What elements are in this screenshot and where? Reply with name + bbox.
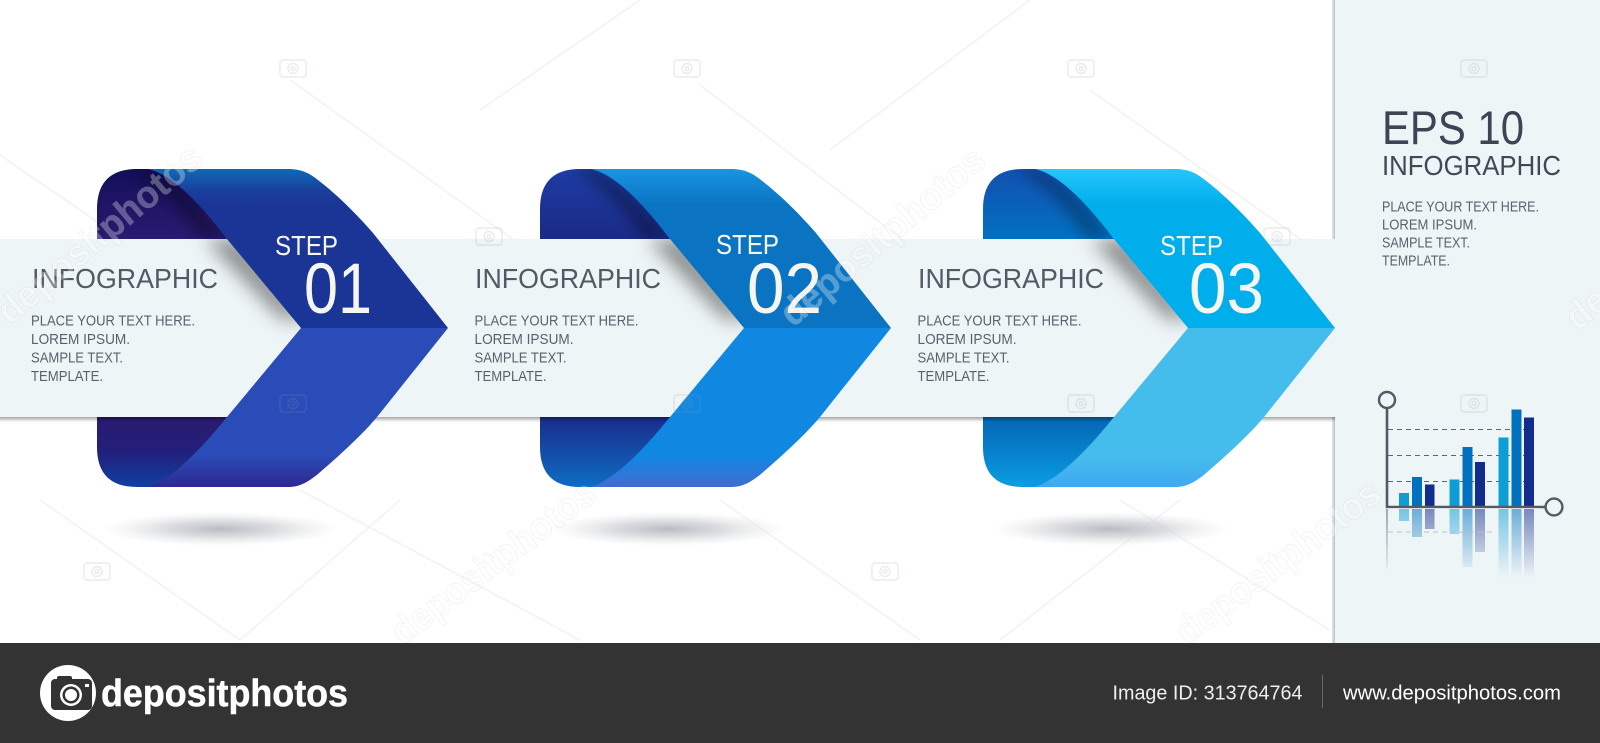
arrow: step 02 bbox=[591, 169, 891, 487]
sidebar heading and text: SAMPLE TEXT. bbox=[1382, 234, 1470, 252]
sidebar heading and text: PLACE YOUR TEXT HERE. bbox=[1382, 198, 1539, 216]
bar chart bbox=[1379, 392, 1562, 580]
watermark overlay: depositphotos bbox=[1168, 472, 1389, 653]
watermark overlay: depositphotos bbox=[772, 139, 994, 335]
website url: www.depositphotos.com bbox=[1342, 682, 1561, 704]
sidebar heading and text: EPS 10 bbox=[1382, 101, 1524, 154]
footer bar bbox=[0, 643, 1600, 743]
text block: step 03: LOREM IPSUM. bbox=[918, 331, 1016, 348]
watermark overlay: depositphotos bbox=[383, 472, 604, 653]
arrow: step 01 bbox=[148, 169, 448, 487]
text block: step 02: INFOGRAPHIC bbox=[475, 263, 661, 294]
text block: step 01: TEMPLATE. bbox=[31, 368, 103, 385]
panel: right sidebar bbox=[1332, 0, 1600, 643]
arrow: step 03 bbox=[1035, 169, 1335, 487]
step 01 labels: STEP bbox=[275, 230, 338, 261]
image id: Image ID: 313764764 bbox=[1112, 682, 1302, 704]
fold shadow on band 2 bbox=[648, 239, 751, 322]
text block: step 03: INFOGRAPHIC bbox=[918, 263, 1104, 294]
step 03 labels: 03 bbox=[1189, 250, 1264, 329]
text block: step 01: LOREM IPSUM. bbox=[31, 331, 130, 348]
step 03 labels: STEP bbox=[1160, 230, 1223, 261]
shape backs: step 01 bbox=[97, 169, 240, 487]
sidebar heading and text: INFOGRAPHIC bbox=[1382, 150, 1561, 181]
sidebar heading and text: LOREM IPSUM. bbox=[1382, 216, 1477, 234]
text block: step 02: SAMPLE TEXT. bbox=[474, 350, 566, 366]
text block: step 03 bbox=[918, 263, 1104, 385]
floor shadow 2 bbox=[550, 512, 786, 546]
logo wordmark: depositphotos bbox=[101, 673, 348, 715]
step 01 labels: 01 bbox=[304, 250, 372, 329]
shape backs: step 02 bbox=[540, 169, 683, 487]
fold shadow on band 3 bbox=[1091, 239, 1194, 322]
sidebar heading and text: TEMPLATE. bbox=[1382, 252, 1450, 270]
text block: step 01: SAMPLE TEXT. bbox=[31, 350, 123, 366]
text block: step 02 bbox=[474, 263, 661, 385]
watermark overlay bbox=[0, 137, 1600, 653]
horizontal band bbox=[0, 239, 1340, 422]
text block: step 02: LOREM IPSUM. bbox=[474, 331, 574, 348]
text block: step 03: PLACE YOUR TEXT HERE. bbox=[918, 312, 1082, 330]
fold shadow on band 1 bbox=[205, 239, 308, 322]
step 02 labels bbox=[716, 229, 822, 329]
text block: step 01: PLACE YOUR TEXT HERE. bbox=[31, 312, 195, 330]
chart reflection bbox=[1380, 508, 1540, 580]
step 01 labels bbox=[275, 230, 372, 329]
text block: step 03: TEMPLATE. bbox=[918, 368, 990, 385]
text block: step 03: SAMPLE TEXT. bbox=[918, 350, 1010, 366]
text block: step 01: INFOGRAPHIC bbox=[32, 263, 218, 294]
watermark camera icons bbox=[84, 60, 1487, 580]
step 02 labels: STEP bbox=[716, 229, 779, 260]
shape backs: step 03 bbox=[983, 169, 1126, 487]
text block: step 02: TEMPLATE. bbox=[474, 368, 546, 385]
step 03 labels bbox=[1160, 230, 1264, 329]
icon: camera logo bbox=[40, 665, 96, 721]
step 02 labels: 02 bbox=[747, 250, 822, 329]
text block: step 02: PLACE YOUR TEXT HERE. bbox=[474, 312, 638, 330]
divider bbox=[1322, 675, 1323, 708]
watermark lines bbox=[0, 0, 1330, 640]
floor shadow 1 bbox=[103, 512, 339, 546]
text block: step 01 bbox=[31, 263, 218, 385]
floor shadow 3 bbox=[992, 512, 1228, 546]
sidebar heading and text bbox=[1382, 101, 1561, 270]
